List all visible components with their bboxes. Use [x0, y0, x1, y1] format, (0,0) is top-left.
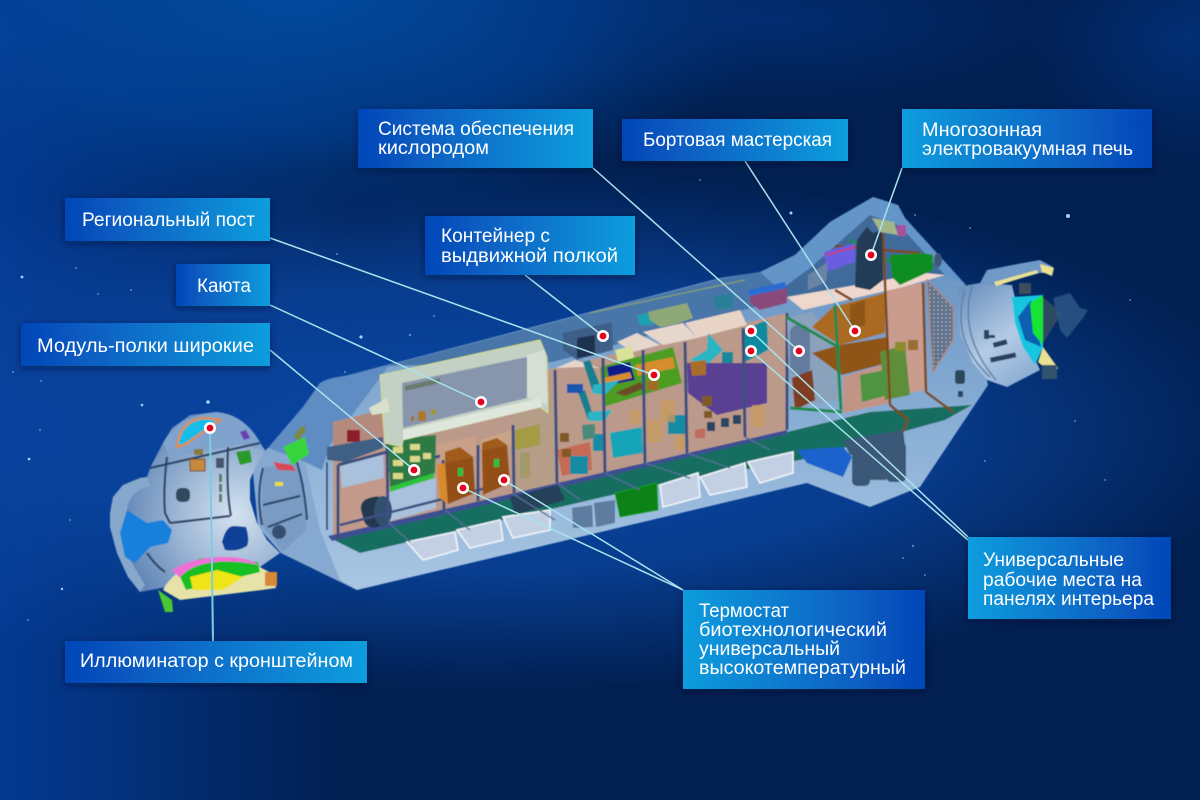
neck equipment (green board)	[273, 426, 309, 486]
neck cylinder	[272, 525, 286, 539]
ring grooves	[961, 286, 996, 380]
stars	[12, 179, 1131, 621]
label: universal workstations: Универсальные	[983, 550, 1124, 571]
furnace body	[855, 227, 883, 290]
brown tray	[615, 382, 645, 396]
navy panel	[607, 362, 635, 385]
label: cabin	[176, 264, 270, 306]
label: container with shelf: выдвижной полкой	[441, 246, 618, 267]
label: wide shelf modules: Модуль-полки широкие	[37, 336, 254, 357]
node shell	[110, 412, 280, 592]
docking ring	[110, 477, 150, 592]
funnel	[120, 510, 172, 563]
furnace-side green box	[890, 253, 933, 285]
interior frames	[327, 313, 787, 540]
lower window assembly	[158, 557, 277, 612]
label: oxygen system: кислородом	[378, 138, 489, 159]
label: porthole with bracket	[65, 641, 367, 683]
label: universal workstations: рабочие места на	[983, 570, 1142, 591]
right bay: equipment	[786, 218, 953, 486]
label: cabin: Каюта	[197, 276, 251, 297]
label: wide shelf modules	[21, 323, 270, 366]
grey boxes	[572, 505, 593, 528]
teal unit	[637, 312, 653, 325]
label: multizone furnace	[902, 109, 1152, 168]
marker dots	[204, 249, 877, 494]
white boxes	[407, 452, 793, 560]
floor dark edge	[328, 430, 787, 541]
label: universal workstations: панелях интерьера	[983, 589, 1154, 610]
blue interior	[1018, 300, 1041, 347]
shelf	[600, 347, 682, 407]
blue bar	[567, 384, 583, 393]
brown thermostat boxes	[437, 438, 510, 504]
label: regional post	[65, 198, 270, 241]
hull body	[258, 197, 988, 590]
right cone inner	[780, 215, 945, 297]
green frames	[786, 240, 890, 412]
label: multizone furnace: электровакуумная печь	[922, 139, 1133, 160]
green box	[615, 483, 658, 517]
label: porthole with bracket: Иллюминатор с кронштейном	[80, 651, 353, 672]
green cylinders	[880, 345, 910, 400]
teal panel	[743, 320, 768, 363]
cyan shell	[1012, 295, 1043, 365]
purple/red pipes	[824, 243, 855, 272]
label: onboard workshop	[622, 119, 848, 161]
orange strip	[635, 357, 675, 376]
illustration: orbital module cutaway	[110, 197, 1088, 612]
neck ring ribs	[259, 462, 307, 527]
teal small	[668, 415, 686, 434]
purple block	[687, 363, 767, 415]
label: thermostat	[683, 590, 925, 689]
neck fittings	[984, 330, 1016, 363]
tan boxes	[630, 400, 765, 450]
purple unit	[750, 288, 787, 310]
interior back wall	[333, 313, 787, 538]
cylinder (left bay)	[359, 494, 392, 530]
large teal box	[610, 427, 643, 458]
right cone top	[760, 197, 965, 290]
main hull	[252, 197, 988, 590]
mid interior equipment	[557, 320, 768, 476]
lower bracket	[1038, 347, 1058, 375]
label: regional post: Региональный пост	[82, 210, 255, 231]
upper bracket	[980, 260, 1053, 286]
under-floor boxes	[407, 452, 793, 560]
label: thermostat: биотехнологический	[699, 620, 887, 641]
cabin container	[369, 340, 548, 447]
cyan seats	[583, 360, 600, 393]
grey-green	[582, 424, 595, 440]
right docking node	[955, 260, 1088, 397]
upper window	[177, 418, 220, 447]
mesh panel	[927, 280, 953, 372]
blue unit	[797, 447, 852, 477]
label: oxygen system: Система обеспечения	[378, 119, 574, 140]
neck	[957, 283, 1040, 387]
label: oxygen system	[358, 109, 593, 168]
dark triangle	[1043, 297, 1062, 343]
pink walls	[885, 283, 925, 397]
ceiling equipment	[556, 282, 787, 368]
deck	[787, 273, 945, 310]
floor grid	[389, 437, 770, 542]
brown small	[560, 396, 712, 457]
rack orange	[812, 293, 885, 345]
label: thermostat: Термостат	[699, 601, 789, 622]
label: thermostat: высокотемпературный	[699, 658, 906, 679]
hull green seam	[590, 280, 745, 313]
faded back cone	[1053, 293, 1088, 338]
ribs	[147, 443, 260, 572]
brown frames	[835, 233, 953, 437]
neck ring	[252, 448, 357, 590]
side hole	[222, 526, 248, 550]
pale ceiling panels	[617, 333, 660, 352]
label: container with shelf	[425, 216, 635, 275]
upper dome shade	[163, 412, 264, 458]
dark box	[563, 322, 613, 360]
translucent dome left	[268, 364, 390, 470]
label: container with shelf: Контейнер с	[441, 226, 550, 247]
dark column	[787, 312, 840, 408]
hatch fittings	[955, 370, 965, 397]
dark teal box	[713, 293, 733, 310]
leader lines	[210, 161, 968, 641]
dark nozzles	[707, 415, 741, 431]
left spherical docking node	[110, 412, 280, 612]
brown under cyan seat	[690, 360, 706, 376]
top band shade	[385, 270, 780, 366]
dark tanks	[843, 430, 906, 486]
small fittings	[176, 430, 252, 502]
label: thermostat: универсальный	[699, 639, 840, 660]
label: multizone furnace: Многозонная	[922, 120, 1042, 141]
floor	[330, 405, 972, 553]
blue top unit	[748, 282, 787, 298]
circuit boards	[388, 435, 436, 492]
sage block	[648, 303, 693, 327]
left bay walls	[327, 390, 555, 533]
green panel	[1030, 295, 1043, 345]
label: universal workstations	[968, 537, 1171, 619]
label: onboard workshop: Бортовая мастерская	[643, 130, 832, 151]
